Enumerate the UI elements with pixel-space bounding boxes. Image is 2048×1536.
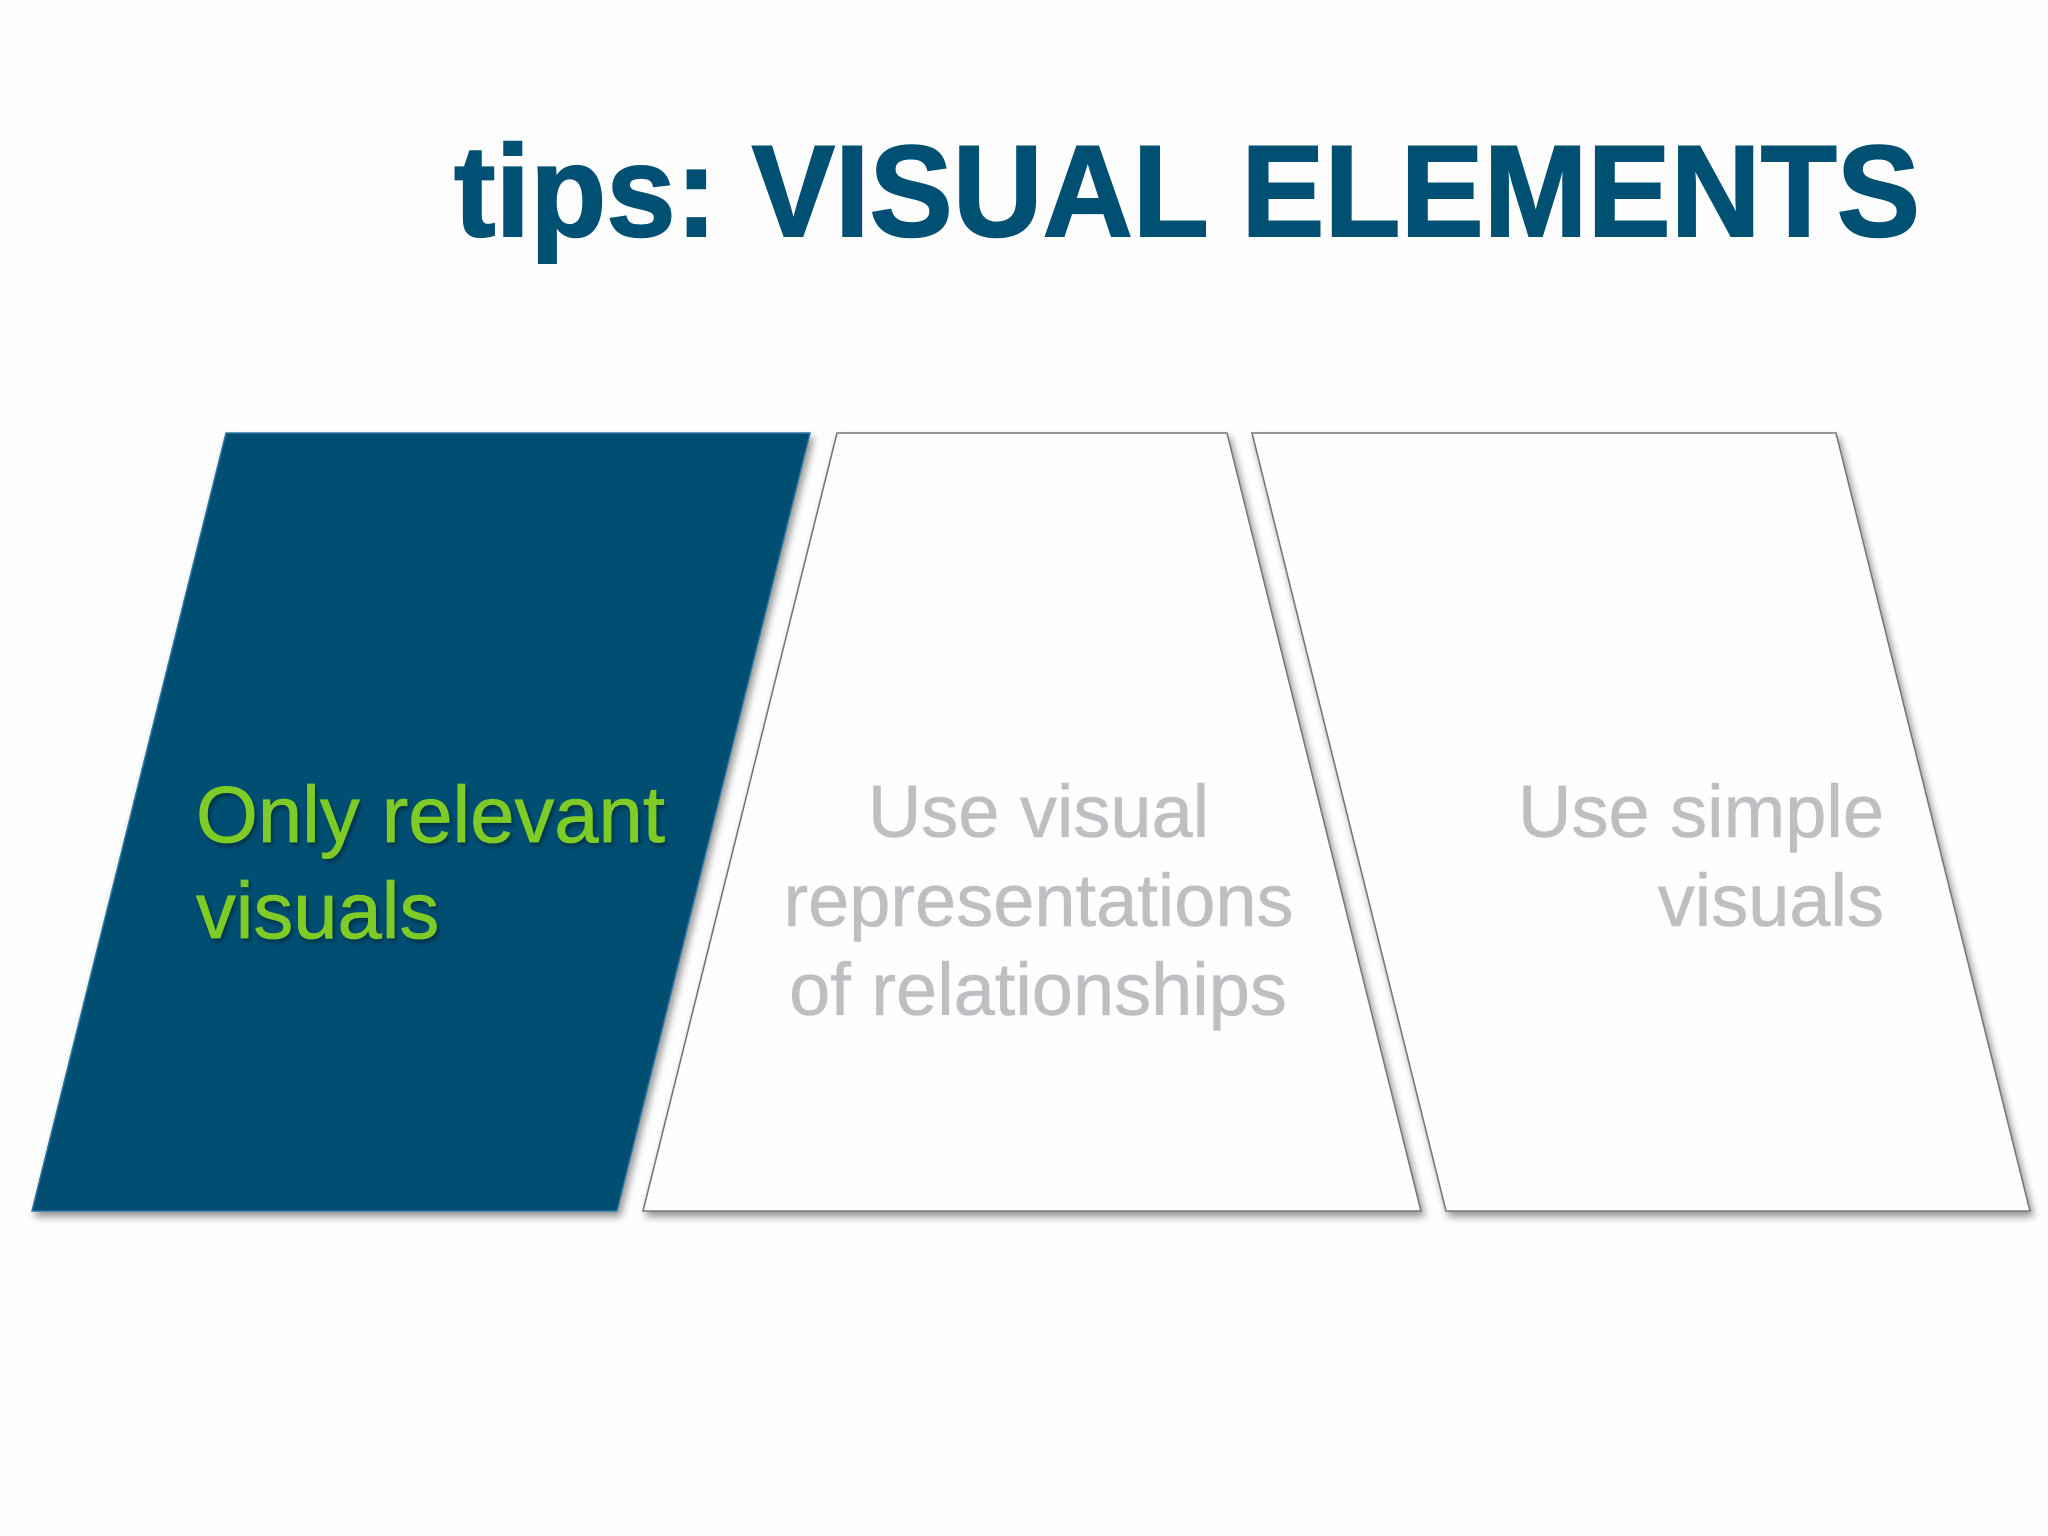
title: tips: VISUAL ELEMENTS	[454, 118, 1920, 264]
panel text: simple visuals: Use simple	[1518, 770, 1884, 853]
panel: only relevant visuals	[32, 433, 810, 1211]
panel text: visual representations: Use visual	[868, 770, 1209, 853]
panel text: only relevant visuals: visuals	[196, 866, 439, 955]
panel text: visual representations: of relationships	[789, 948, 1287, 1031]
panel shape: blue parallelogram	[32, 433, 810, 1211]
panel shape: white trapezoid	[643, 433, 1421, 1211]
panel: use simple visuals	[1252, 433, 2030, 1211]
panel text: simple visuals: visuals	[1658, 859, 1884, 942]
panel text: only relevant visuals: Only relevant	[196, 770, 665, 859]
panel text: visual representations	[783, 770, 1294, 1031]
panel shape: white parallelogram	[1252, 433, 2030, 1211]
panel text: only relevant visuals	[196, 770, 665, 955]
panel: visual representations of relationships	[643, 433, 1421, 1211]
panel text: visual representations: representations	[783, 859, 1294, 942]
panel text: simple visuals	[1518, 770, 1884, 942]
